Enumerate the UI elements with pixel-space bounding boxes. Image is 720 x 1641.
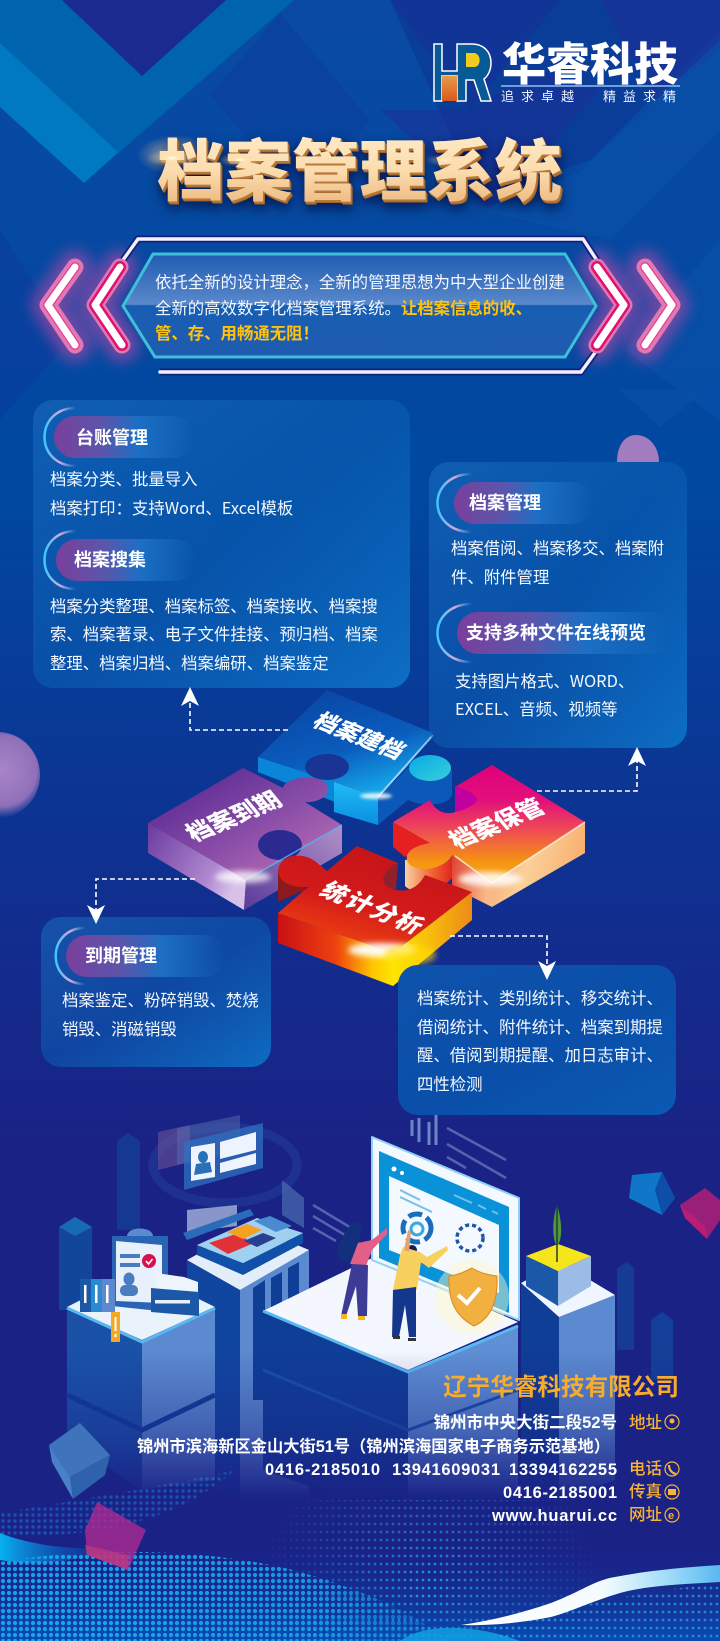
text: 统计分析: 档案统计、类别统计、移交统计、 [417,985,663,1009]
right tower [521,1205,615,1500]
banner: 管、存、用畅通无阻！ [155,320,319,344]
monitor [372,1137,519,1320]
card: 档案管理 / 在线预览 [429,462,687,748]
website row: 网址 [629,1501,662,1525]
text: 档案搜集: 索、档案著录、电子文件挂接、预归档、档案 [50,621,378,645]
text: 到期管理: 销毁、消磁销毁 [62,1016,177,1040]
text: 统计分析 [417,985,663,1095]
warning tag [111,1312,120,1342]
heading: 台账管理 [44,408,194,466]
middle tower [183,1209,309,1500]
text: 统计分析: 借阅统计、附件统计、档案到期提 [417,1014,663,1038]
arrow: 档案建档 to 台账管理 [181,687,288,730]
text: 统计分析: 醒、借阅到期提醒、加日志审计、 [417,1042,663,1066]
heading: 到期管理 [56,928,226,984]
text: 档案管理 [451,535,664,588]
puzzle labels: 档案建档 [307,704,415,765]
title: 档案管理系统 [157,118,562,215]
puzzle labels [177,704,552,941]
banner frame [123,239,598,372]
text: 统计分析: 四性检测 [417,1071,483,1095]
logo [434,28,683,105]
company info [137,1368,679,1525]
card: 台账管理 / 档案搜集 [33,400,410,688]
heading: 到期管理: 到期管理 [85,942,157,968]
fax row [503,1478,679,1502]
cube: pink right [680,1188,720,1239]
text: 台账管理: 档案分类、批量导入 [50,466,198,490]
cube: pink lower left [85,1502,146,1570]
puzzle: blue piece 档案建档 [258,690,452,825]
text: 档案搜集 [50,593,378,674]
website row: www.huarui.cc [491,1507,617,1525]
heading: 档案管理: 档案管理 [469,489,541,515]
company name: 辽宁华睿科技有限公司 [443,1368,679,1402]
illustration: isometric office [59,1115,673,1520]
logo: 精益求精 [603,86,683,105]
text: 档案搜集: 整理、档案归档、档案编研、档案鉴定 [50,650,329,674]
address row 2: 锦州市滨海新区金山大街51号（锦州滨海国家电子商务示范基地） [137,1436,610,1456]
neon glow [48,267,672,345]
puzzle: orange piece 档案保管 [393,765,585,907]
bottom dotted wave [0,1470,720,1641]
phone row: 0416-2185010 [265,1461,380,1479]
heading: 档案管理 [438,474,594,532]
main platform [262,1258,518,1491]
phone row: 13941609031 [392,1461,500,1479]
card: 统计分析 [398,965,676,1115]
phone row: 电话 [629,1455,662,1479]
left platform [67,1228,215,1490]
puzzle: red piece 统计分析 [278,846,472,986]
phone row: 13394162255 [509,1461,617,1479]
background towers [59,1133,673,1380]
arrow: 档案到期 to 到期管理 [87,879,195,924]
logo mark HR [434,44,491,101]
slogan: 追求卓越 [501,86,581,105]
wordmark: 华睿科技 [502,28,678,93]
website row: e [668,1510,674,1522]
binders [80,1279,92,1312]
woman [337,1222,387,1320]
fax row: 传真 [629,1478,662,1502]
shield [435,1260,509,1334]
heading: 在线预览 [438,604,672,662]
cube and tree [526,1256,558,1306]
text: 档案搜集: 档案分类整理、档案标签、档案接收、档案搜 [50,593,378,617]
decorative cubes [49,1172,720,1570]
phone row [265,1455,679,1479]
arrow: 档案保管 to 档案管理 [537,747,646,791]
puzzle labels: 档案保管 [440,790,552,855]
puzzle labels: 档案到期 [177,783,289,848]
banner hexagon [123,254,596,357]
clipboard [112,1236,168,1312]
banner text: 依托全新的设计理念，全新的管理思想为中大型企业创建 [155,269,565,293]
heading: 台账管理: 台账管理 [76,424,148,450]
heading: 档案搜集 [44,531,196,589]
neon chevrons [48,267,672,345]
text: 到期管理 [62,987,259,1040]
tablet [197,1233,303,1275]
fax row: 0416-2185001 [503,1484,617,1502]
address row: 地址 [629,1409,662,1433]
folder [162,1274,198,1292]
card: 到期管理 [41,917,271,1067]
man [392,1230,448,1341]
text: 在线预览: 支持图片格式、WORD、 [455,668,634,692]
banner: 全新的高效数字化档案管理系统。让档案信息的收、 [155,295,532,319]
cube: blue top right [629,1172,675,1215]
hologram screens [153,1115,506,1244]
chevron band top left [0,0,294,183]
cube: blue lower left [49,1423,110,1499]
decorative spheres [0,435,659,818]
banner [48,239,672,372]
heading: 在线预览: 支持多种文件在线预览 [466,619,646,645]
address row [434,1409,679,1433]
text: 到期管理: 档案鉴定、粉碎销毁、焚烧 [62,987,259,1011]
website row [491,1501,679,1525]
text: 在线预览: EXCEL、音频、视频等 [455,696,617,720]
heading: 档案搜集: 档案搜集 [74,546,146,572]
text: 档案管理: 件、附件管理 [451,564,549,588]
puzzle: purple piece 档案到期 [148,768,342,910]
text: 档案管理: 档案借阅、档案移交、档案附 [451,535,664,559]
arrow: 统计分析 to 统计卡片 [450,936,556,980]
text: 台账管理 [50,466,293,519]
text: 台账管理: 档案打印：支持Word、Excel模板 [50,495,293,519]
address row: 锦州市中央大街二段52号 [434,1412,617,1432]
puzzle labels: 统计分析 [313,874,435,941]
text: 在线预览 [455,668,634,720]
